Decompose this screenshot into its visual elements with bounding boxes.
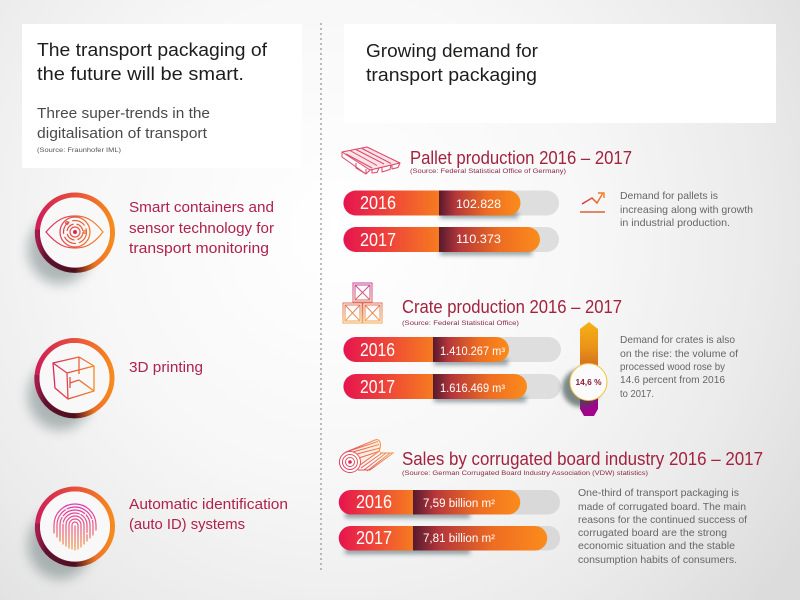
text: crates demand: Demand for crates is also [620, 334, 735, 346]
icon: 3D cube [53, 357, 94, 399]
heading: pallet production: Pallet production 2016 – 2017 [410, 148, 632, 168]
icon: pallet [342, 147, 400, 174]
source: VDW: (Source: German Corrugated Board Industry Association (VDW) statistics) [402, 470, 648, 477]
thermometer gauge: 14,6 % [562, 322, 607, 416]
heading: the transport packaging: The transport packaging of [37, 40, 268, 60]
bar: pallets 2016 [343, 190, 559, 218]
bar: corrugated 2017: 7,81 billion m² [423, 533, 495, 545]
section: crate production [343, 283, 738, 416]
source note: (Source: Fraunhofer IML) [37, 147, 121, 154]
source: federal statistical office: (Source: Federal Statistical Office) [402, 320, 519, 327]
bar: crates 2017: 1.616.469 m³ [440, 383, 505, 395]
heading: crate production: Crate production 2016 – 2017 [402, 297, 622, 317]
heading: the transport packaging: the future will be smart. [37, 64, 244, 84]
bar: corrugated 2016 [339, 490, 560, 518]
text: pallets demand: Demand for pallets is [620, 190, 718, 202]
trend 1: smart containers [28, 195, 274, 284]
bar: crates 2016: 2016 [360, 340, 395, 360]
text: corrugated demand: economic situation and the stable [578, 540, 735, 552]
bar: crates 2017: 2017 [360, 377, 395, 397]
icon: crates [343, 283, 382, 323]
dotted divider [320, 23, 322, 570]
bar: pallets 2017: 110.373 [456, 234, 501, 246]
bar: corrugated 2017: 2017 [356, 528, 392, 548]
bar: pallets 2016: 102.828 [456, 199, 501, 211]
label: smart containers: sensor technology for [129, 220, 274, 237]
label: auto ID: (auto ID) systems [129, 516, 245, 533]
panel: smart packaging intro [22, 24, 302, 168]
subheading: three super-trends [37, 105, 210, 142]
icon: rising chart [580, 193, 605, 212]
bar: corrugated 2017 [339, 526, 560, 554]
panel: growing demand heading: Growing demand for [366, 41, 538, 61]
label: auto ID [129, 496, 288, 533]
source: federal statistical office of Germany: (Source: Federal Statistical Office of Germany) [410, 168, 566, 175]
label: auto ID: Automatic identification [129, 496, 288, 513]
bar: pallets 2016: 2016 [360, 193, 396, 213]
text: pallets demand [620, 190, 753, 229]
icon: eye [46, 216, 103, 248]
label: 3D printing: 3D printing [129, 359, 203, 376]
bar: crates 2016 [343, 337, 561, 365]
trend 3: auto ID [28, 489, 288, 579]
bar: pallets 2017: 2017 [360, 230, 396, 250]
section: corrugated board sales [339, 440, 763, 566]
subheading: three super-trends: digitalisation of transport [37, 125, 208, 142]
subheading: three super-trends: Three super-trends in the [37, 105, 210, 122]
text: pallets demand: in industrial production. [620, 217, 730, 229]
label: smart containers: transport monitoring [129, 240, 269, 257]
heading: the transport packaging [37, 40, 268, 84]
text: corrugated demand: consumption habits of consumers. [578, 554, 737, 566]
label: smart containers: Smart containers and [129, 199, 274, 216]
bar: corrugated 2016: 2016 [356, 492, 392, 512]
text: pallets demand: increasing along with growth [620, 204, 753, 216]
text: crates demand: processed wood rose by [620, 361, 726, 373]
panel: growing demand heading [344, 24, 776, 123]
thermometer gauge: 14,6 %: 14,6 % [576, 377, 602, 387]
text: corrugated demand: reasons for the continued success of [578, 514, 747, 526]
text: corrugated demand: made of corrugated board. The main [578, 501, 746, 513]
label: smart containers [129, 199, 274, 257]
bar: corrugated 2016: 7,59 billion m² [423, 498, 495, 510]
text: crates demand: 14.6 percent from 2016 [620, 374, 725, 386]
text: crates demand: to 2017. [620, 388, 654, 400]
bar: pallets 2017 [343, 227, 559, 255]
text: corrugated demand: corrugated board are the strong [578, 527, 727, 539]
text: corrugated demand: One-third of transport packaging is [578, 487, 739, 499]
bar: crates 2016: 1.410.267 m³ [440, 346, 505, 358]
heading: corrugated sales: Sales by corrugated board industry 2016 – 2017 [402, 449, 763, 469]
text: corrugated demand [578, 487, 747, 566]
text: crates demand: on the rise: the volume of [620, 348, 738, 360]
text: crates demand [620, 334, 738, 400]
icon: fingerprint [54, 504, 96, 550]
panel: growing demand heading: transport packaging [366, 65, 537, 85]
icon: corrugated roll [340, 440, 393, 472]
section: pallet production [342, 147, 753, 255]
trend 2: 3D printing [28, 340, 203, 430]
bar: crates 2017 [343, 374, 561, 402]
